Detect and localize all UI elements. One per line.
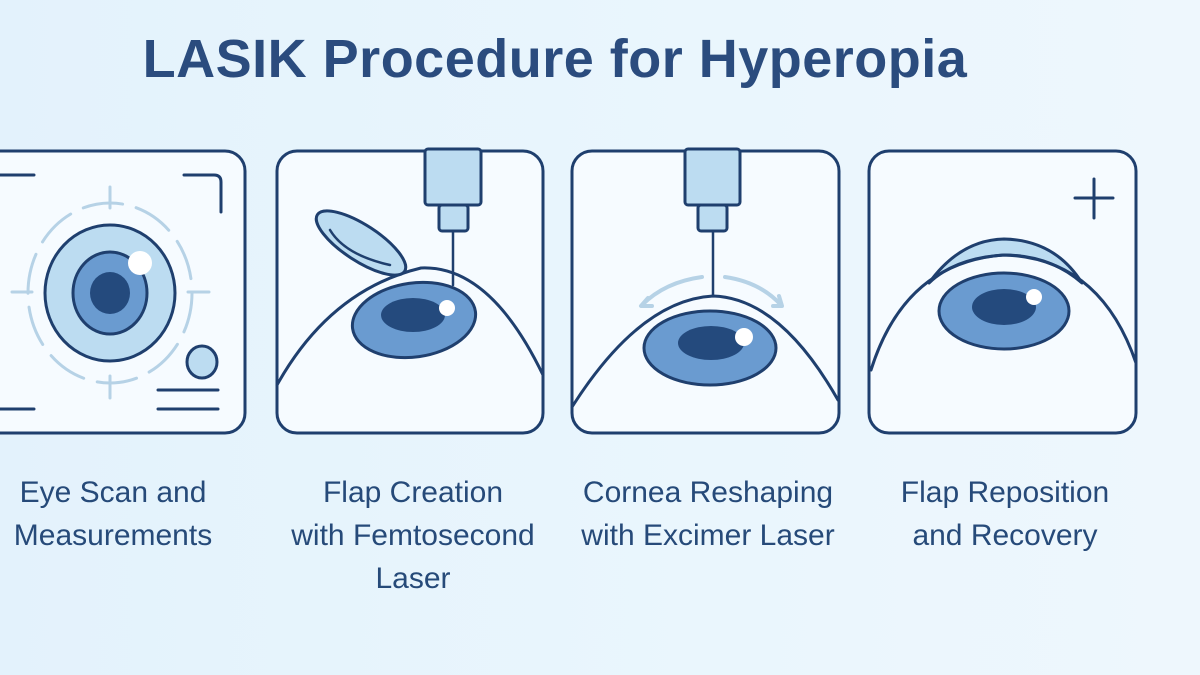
label: step 1: Eye Scan and [20, 476, 206, 509]
panel: cornea reshaping [572, 149, 839, 433]
label: step 4: Flap Reposition [901, 476, 1109, 509]
label: step 4 [901, 476, 1109, 552]
panel: flap creation [277, 149, 543, 433]
label: step 1: Measurements [14, 519, 212, 552]
label: step 4: and Recovery [912, 519, 1098, 552]
panel: eye scan [0, 151, 245, 433]
label: step 3: with Excimer Laser [581, 519, 835, 552]
title: LASIK Procedure for Hyperopia [143, 29, 967, 89]
panel: flap reposition [869, 151, 1136, 433]
label: step 2: Flap Creation [323, 476, 503, 509]
label: step 2 [291, 476, 535, 595]
label: step 3: Cornea Reshaping [583, 476, 833, 509]
label: step 3 [581, 476, 835, 552]
label: step 2: with Femtosecond [291, 519, 535, 552]
label: step 1 [14, 476, 212, 552]
label: step 2: Laser [375, 562, 451, 595]
